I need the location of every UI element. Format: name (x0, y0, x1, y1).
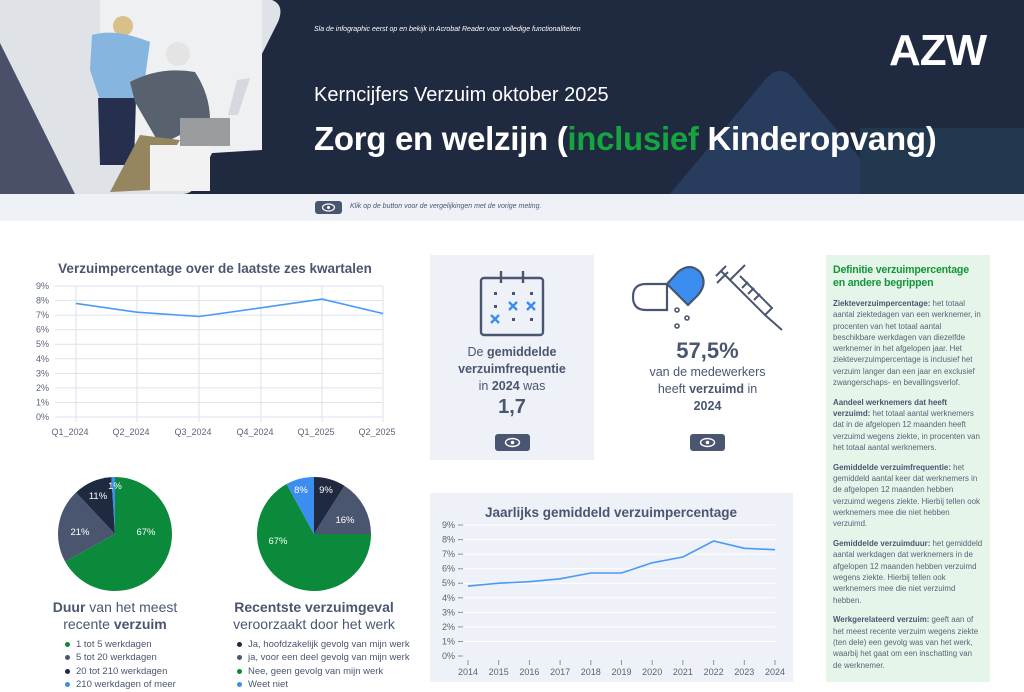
chart: quarterly line: 4% (36, 354, 49, 364)
icon: calendar (480, 271, 544, 336)
chart: yearly line: 7% (442, 549, 455, 559)
text: 57,5%: 57,5% (676, 338, 739, 363)
legend: duur: 5 tot 20 werkdagen (76, 652, 157, 663)
pie chart: duur (58, 477, 172, 591)
chart: yearly line: 2016 (519, 667, 539, 677)
legend: duur: 210 werkdagen of meer (76, 679, 176, 690)
chart: yearly line: 2% (442, 622, 455, 632)
panel: definitions: Aandeel werknemers dat heeft verzuimd: het totaal aantal werknemers dat in de afgelopen 12 maanden heeft verzuimd wegens ziekte, in procenten van het totaal aantal werknemers. (833, 398, 980, 452)
chart: quarterly line: Q1_2024 (51, 427, 89, 437)
chart: quarterly line: 2% (36, 383, 49, 393)
chart: yearly line: 2024 (765, 667, 785, 677)
text: 57,5%: heeft verzuimd in (658, 382, 757, 396)
panel: definitions: Gemiddelde verzuimduur: het gemiddeld aantal werkdagen dat werknemers in de afgelopen 12 maanden hebben verzuimd wegens ziekte. Hierbij tellen ook werknemers mee die niet verzuimd hebben. (833, 539, 982, 605)
chart: yearly line: 5% (442, 578, 455, 588)
text: 57,5%: 2024 (694, 399, 721, 413)
text: frequency statement (458, 345, 566, 418)
chart: yearly line: 6% (442, 564, 455, 574)
panel: verzuimfrequentie (430, 255, 594, 460)
chart: quarterly line: Q2_2025 (358, 427, 396, 437)
chart: yearly line: 1% (442, 636, 455, 646)
chart: yearly line: 2020 (642, 667, 662, 677)
heading: oorzaak: veroorzaakt door het werk (233, 616, 395, 632)
chart: quarterly line: Q2_2024 (112, 427, 150, 437)
heading: duur (53, 599, 178, 632)
chart: quarterly line: 3% (36, 368, 49, 378)
heading: duur: recente verzuim (63, 616, 167, 632)
chart: quarterly line (36, 261, 396, 438)
chart: quarterly line: 0% (36, 412, 49, 422)
chart: quarterly line: 7% (36, 310, 49, 320)
text: frequency statement: De gemiddelde (468, 345, 556, 359)
chart: yearly line: 2014 (458, 667, 478, 677)
pie chart: oorzaak: 67% (268, 536, 288, 547)
text: 57,5% (649, 338, 766, 413)
text: frequency statement: 1,7 (498, 396, 526, 418)
legend: duur: 20 tot 210 werkdagen (76, 666, 167, 677)
text: frequency statement: in 2024 was (479, 379, 545, 393)
info strip (0, 194, 1024, 221)
pie chart: duur: 67% (136, 527, 156, 538)
pie chart: duur: 21% (70, 527, 90, 538)
pie chart: duur: 1% (108, 481, 122, 492)
text: frequency statement: verzuimfrequentie (458, 362, 566, 376)
legend: duur (65, 639, 176, 690)
icon: pill and syringe (632, 264, 783, 331)
strip text: Klik op de button voor de vergelijkingen met de vorige meting. (350, 203, 541, 210)
header banner (0, 0, 1024, 194)
legend: oorzaak: Weet niet (248, 679, 288, 690)
chart: yearly line: 2022 (704, 667, 724, 677)
main title: Zorg en welzijn (inclusief Kinderopvang) (314, 120, 936, 157)
chart: quarterly line: 9% (36, 281, 49, 291)
decorative A shape (670, 71, 1024, 194)
pie chart: oorzaak (257, 477, 371, 591)
chart: yearly line: 8% (442, 535, 455, 545)
chart: yearly line: 2023 (734, 667, 754, 677)
heading: oorzaak: Recentste verzuimgeval (234, 599, 394, 615)
panel: definitions (826, 255, 990, 682)
note text: Sla de infographic eerst op en bekijk in Acrobat Reader voor volledige functionaliteiten (314, 26, 581, 33)
chart: quarterly line: 8% (36, 296, 49, 306)
chart: quarterly line: Q3_2024 (174, 427, 212, 437)
heading: duur: Duur van het meest (53, 599, 177, 615)
heading: oorzaak (233, 599, 395, 632)
chart: yearly line: 2019 (611, 667, 632, 677)
chart: yearly line: Jaarlijks gemiddeld verzuimpercentage (485, 505, 738, 520)
chart: yearly line: 4% (442, 593, 455, 603)
icon: eye button (495, 434, 530, 451)
photo (0, 0, 280, 194)
chart: quarterly line: 5% (36, 339, 49, 349)
definitions heading: Definitie verzuimpercentage en andere begrippen (833, 264, 969, 289)
pie chart: duur: 11% (89, 491, 108, 502)
chart: quarterly line: Q4_2024 (236, 427, 274, 437)
chart: yearly line: 0% (442, 651, 455, 661)
chart: quarterly line: 1% (36, 398, 49, 408)
pie chart: oorzaak: 8% (294, 485, 308, 496)
pie chart: oorzaak: 9% (319, 485, 333, 496)
legend: oorzaak (237, 639, 410, 690)
logo: AZW: AZW (889, 26, 986, 75)
chart: quarterly line: 6% (36, 325, 49, 335)
panel: definitions: Ziekteverzuimpercentage: het totaal aantal ziektedagen van een werknemer, in procenten van het totaal aantal beschikbare werkdagen van diezelfde werknemer in het afgelopen jaar. Het ziekteverzuimpercentage is inclusief het verzuim langer dan een jaar en exclusief zwangerschaps- en bevallingsverlof. (833, 299, 981, 387)
chart: yearly line: 9% (442, 520, 455, 530)
text: 57,5%: van de medewerkers (649, 365, 766, 379)
chart: yearly line: 2021 (673, 667, 693, 677)
legend: oorzaak: ja, voor een deel gevolg van mijn werk (248, 652, 410, 663)
chart: yearly line (430, 493, 793, 682)
icon: eye button (315, 201, 342, 214)
pie chart: oorzaak: 16% (335, 515, 355, 526)
chart: quarterly line: Verzuimpercentage over de laatste zes kwartalen (58, 261, 372, 276)
chart: yearly line: 2017 (550, 667, 570, 677)
icon: eye button (690, 434, 725, 451)
legend: duur: 1 tot 5 werkdagen (76, 639, 152, 650)
legend: oorzaak: Nee, geen gevolg van mijn werk (248, 666, 383, 677)
chart: yearly line: 2015 (489, 667, 509, 677)
chart: yearly line: 2018 (581, 667, 601, 677)
chart: yearly line: 3% (442, 607, 455, 617)
subtitle: Kerncijfers Verzuim oktober 2025 (314, 84, 609, 106)
legend: oorzaak: Ja, hoofdzakelijk gevolg van mijn werk (248, 639, 410, 650)
panel: verzuimd percentage (632, 264, 783, 451)
panel: definitions: Werkgerelateerd verzuim: geeft aan of het meest recente verzuim wegens ziekte (ten dele) een gevolg was van het werk, waarbij het gaat om een inschatting van de werknemer. (833, 615, 978, 670)
panel: definitions: Gemiddelde verzuimfrequentie: het gemiddeld aantal keer dat werknemers in de afgelopen 12 maanden hebben verzuimd wegens ziekte. Hierbij tellen ook werknemers mee die niet hebben verzuimd. (833, 463, 980, 528)
chart: quarterly line: Q1_2025 (297, 427, 335, 437)
